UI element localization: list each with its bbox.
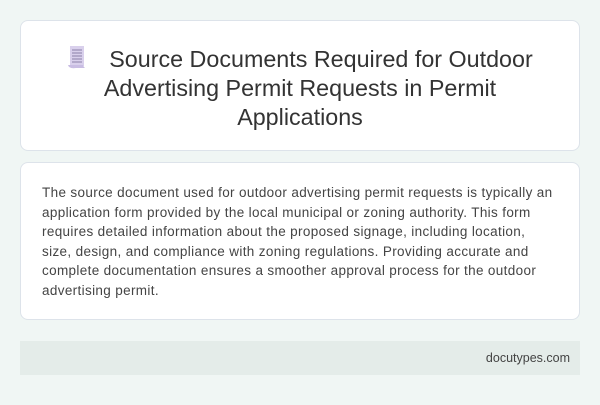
title: Source Documents Required for Outdoor Advertising Permit Requests in Permit Applications (104, 46, 533, 130)
text block (42, 185, 552, 298)
text block: size, design, and compliance with zoning regulations. Providing accurate and complete documentation ensures a smoother approval process for the outdoor advertising permit. (42, 244, 536, 298)
footer (20, 341, 580, 375)
panel: header (20, 20, 580, 151)
text block: The source document used for outdoor advertising permit requests is typically an application form provided by the local municipal or zoning authority. This form requires detailed information about the proposed signage, including location, (42, 185, 552, 239)
panel: description (20, 162, 580, 320)
footer: docutypes.com (486, 351, 570, 365)
